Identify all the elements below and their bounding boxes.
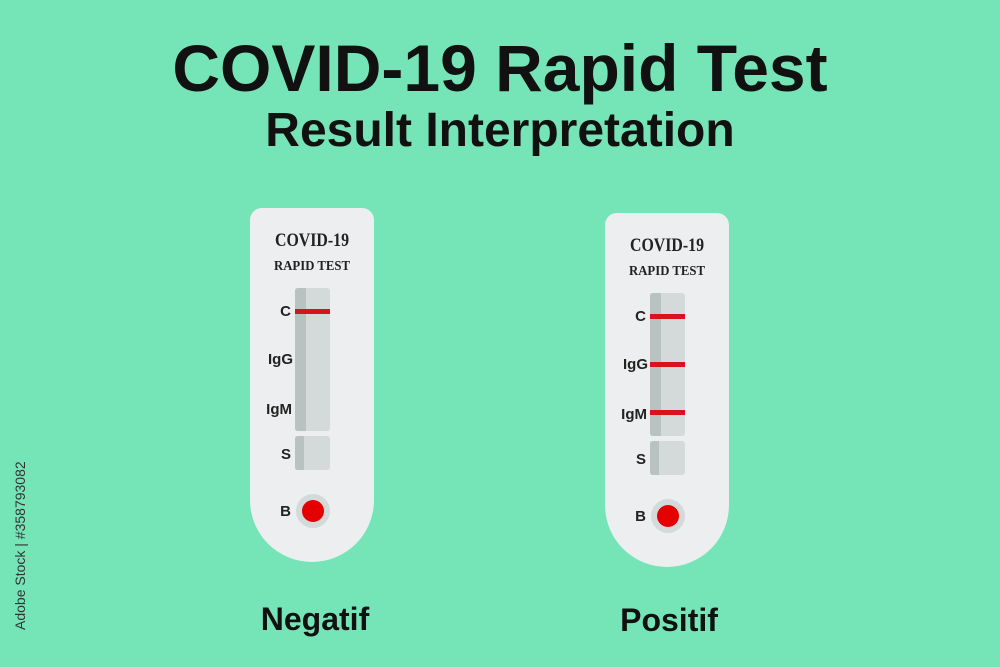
cassette: positive xyxy=(605,213,729,567)
cassette: negative: RAPID TEST xyxy=(274,259,351,274)
cassette: positive: B xyxy=(635,508,646,525)
cassette: positive: IgM xyxy=(621,406,647,423)
cassette: negative: IgM xyxy=(266,401,292,418)
cassette: negative: C xyxy=(280,303,291,320)
cassette: positive: RAPID TEST xyxy=(629,264,706,279)
cassette: negative: COVID-19 xyxy=(275,230,349,251)
cassette: positive: IgG xyxy=(623,356,648,373)
cassette: positive: C xyxy=(635,308,646,325)
cassette: negative: IgG xyxy=(268,351,293,368)
watermark side text: Adobe Stock | #358793082 xyxy=(12,461,28,630)
cassette: positive: COVID-19 xyxy=(630,235,704,256)
label: negatif: Negatif xyxy=(261,601,369,637)
cassette: negative xyxy=(250,208,374,562)
title: COVID-19 Rapid Test xyxy=(172,31,828,105)
cassette: negative: S xyxy=(281,446,291,463)
label: positif: Positif xyxy=(620,602,718,638)
subtitle: Result Interpretation xyxy=(265,104,735,157)
cassette: negative: B xyxy=(280,503,291,520)
cassette: positive: S xyxy=(636,451,646,468)
